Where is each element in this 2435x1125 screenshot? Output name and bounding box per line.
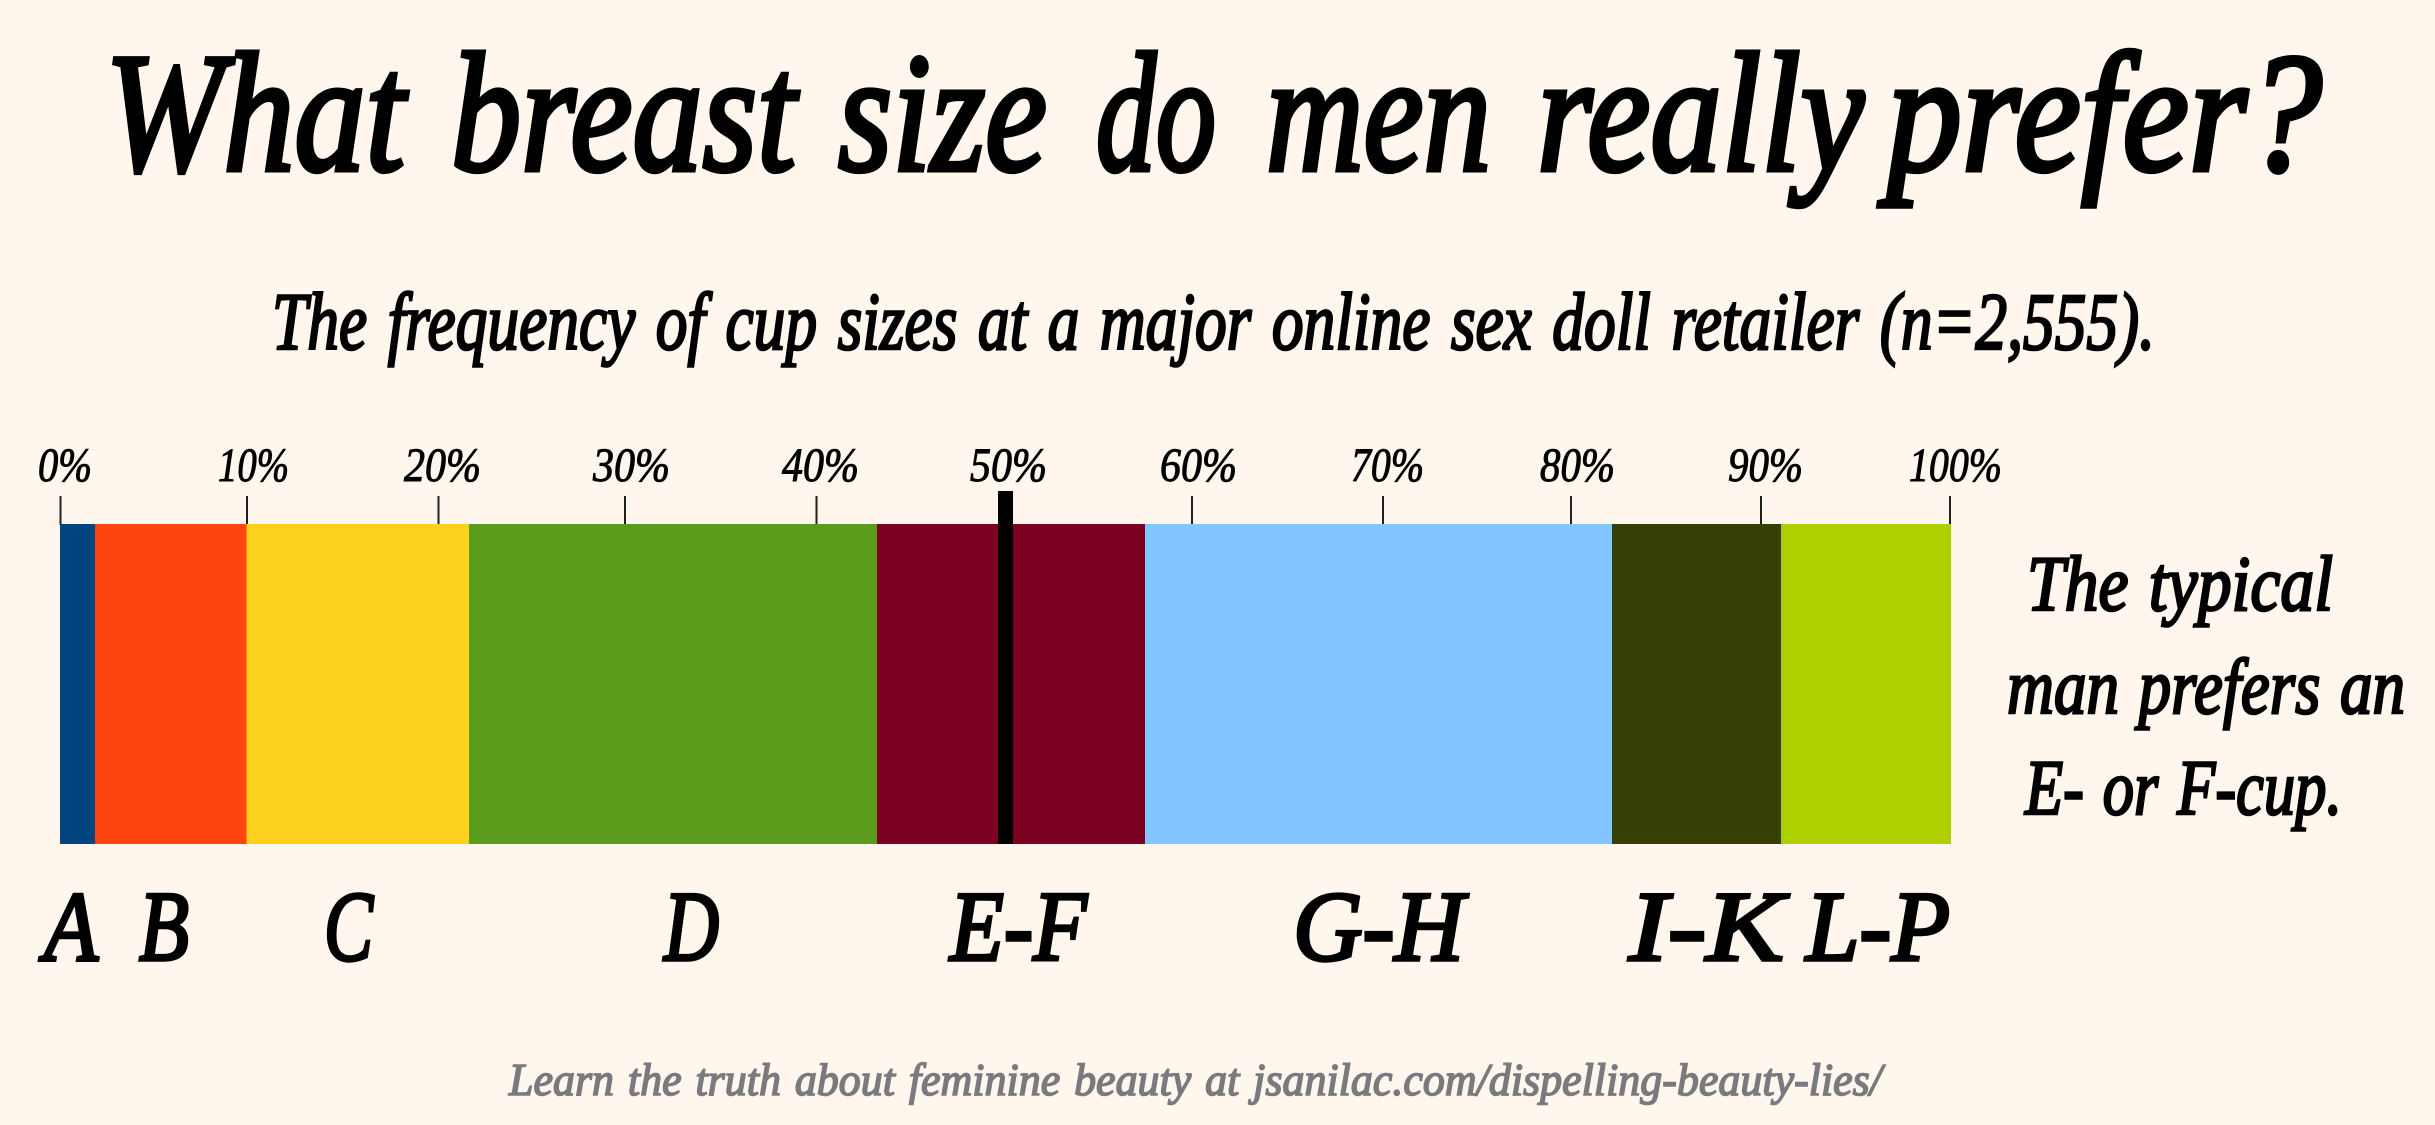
percentage axis: 90% <box>1728 439 1803 492</box>
cup size labels: G-H <box>1293 871 1469 982</box>
percentage axis: 10% <box>218 439 289 492</box>
segment L-P <box>1781 524 1951 844</box>
percentage axis: 20% <box>404 439 481 492</box>
cup size labels: D <box>662 871 719 982</box>
percentage axis: 70% <box>1351 439 1424 492</box>
percentage axis: 100% <box>1909 439 2002 492</box>
median marker at 50% <box>998 491 1013 844</box>
cup size labels: C <box>324 871 374 982</box>
footer: Learn the truth about feminine beauty at jsanilac.com/dispelling-beauty-lies/ <box>508 1054 1886 1105</box>
percentage axis: 60% <box>1160 439 1237 492</box>
cup size labels: E-F <box>948 871 1088 982</box>
cup size labels: B <box>139 871 189 982</box>
cup size labels <box>39 871 1950 982</box>
title: size <box>838 19 1047 207</box>
segment B <box>95 524 246 844</box>
stacked bar of cup sizes <box>60 491 1951 844</box>
cup size labels: L-P <box>1804 871 1950 982</box>
title: prefer? <box>1878 19 2322 207</box>
callout: E- or F-cup. <box>2024 744 2342 831</box>
segment E-F <box>877 524 1145 844</box>
percentage axis: 50% <box>970 439 1047 492</box>
segment C <box>246 524 469 844</box>
percentage axis: 40% <box>782 439 859 492</box>
percentage axis: 30% <box>592 439 670 492</box>
segment G-H <box>1145 524 1612 844</box>
title <box>105 19 2322 207</box>
title: breast <box>451 19 799 207</box>
segment A <box>60 524 95 844</box>
callout: The typical <box>2027 540 2333 627</box>
title: men <box>1266 19 1491 207</box>
cup size labels: I-K <box>1628 871 1789 982</box>
cup size labels: A <box>39 871 99 982</box>
percentage axis: 0% <box>38 439 92 492</box>
title: do <box>1096 19 1216 207</box>
segment I-K <box>1612 524 1781 844</box>
title: really <box>1537 19 1864 207</box>
segment D <box>469 524 877 844</box>
title: What <box>105 19 408 207</box>
percentage axis: 80% <box>1540 439 1615 492</box>
callout <box>2007 540 2405 831</box>
percentage axis <box>38 439 2002 525</box>
